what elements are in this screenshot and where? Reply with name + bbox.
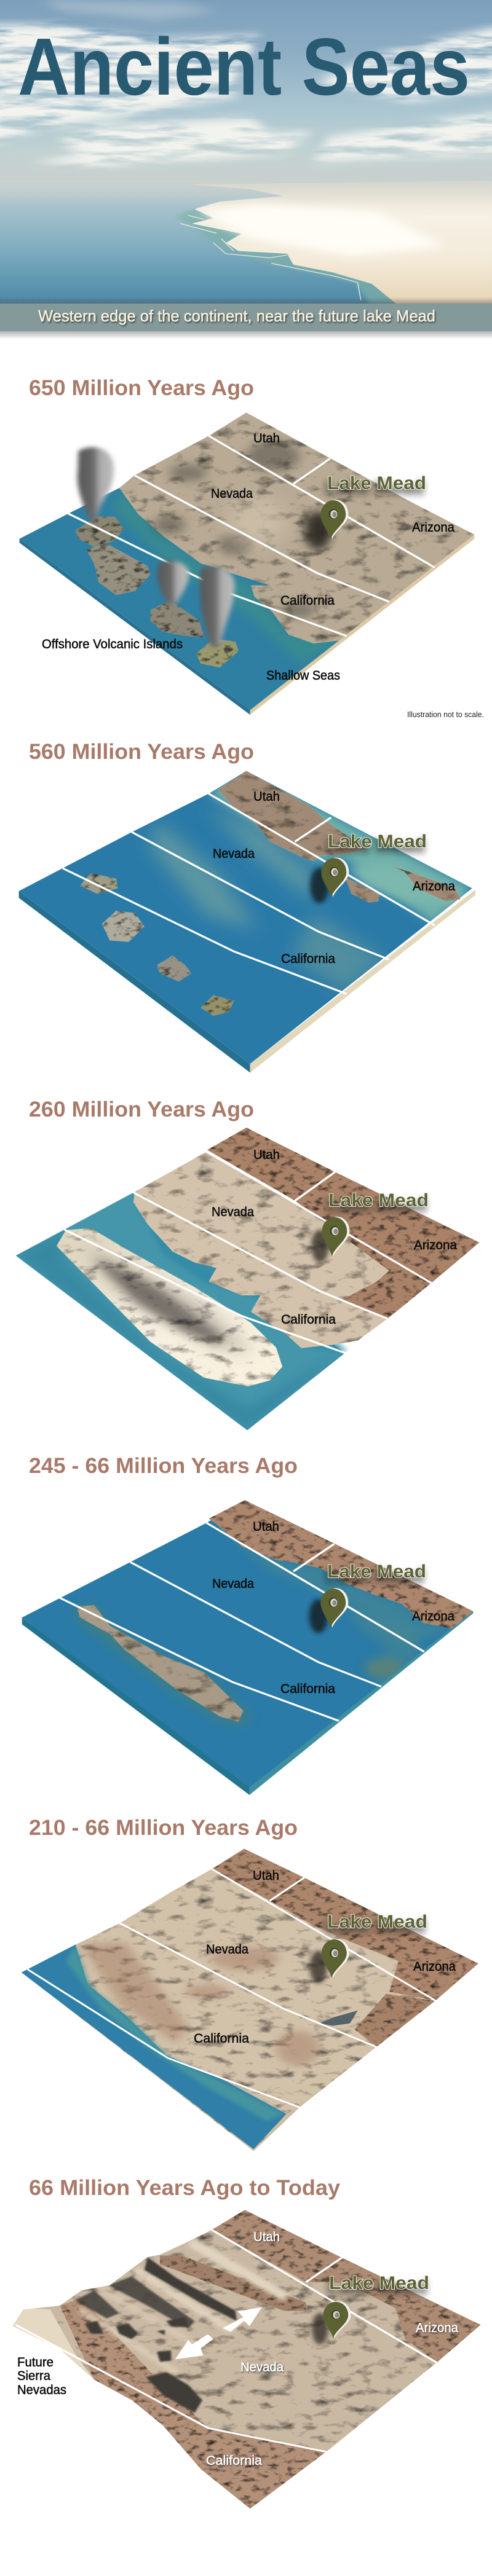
red rock band bbox=[212, 1848, 478, 2001]
panel: map 650 million years ago: Lake Mead bbox=[327, 473, 426, 493]
panel: map 210 - 66 million years ago: California bbox=[194, 2032, 249, 2046]
panel: map 260 million years ago: Arizona bbox=[414, 1238, 457, 1252]
lake bbox=[320, 2011, 358, 2026]
panel: map 650 million years ago: Nevada bbox=[211, 487, 253, 501]
panel: map 245 - 66 million years ago: Utah bbox=[253, 1520, 279, 1534]
tan land bbox=[133, 1152, 432, 1348]
land bbox=[218, 771, 367, 861]
volcanic islands bbox=[75, 517, 239, 667]
panel: map 260 million years ago: Lake Mead bbox=[328, 1190, 429, 1211]
panel: map 66 million years ago to today: Nevada bbox=[240, 2360, 284, 2374]
label: future sierra nevadas: Sierra bbox=[17, 2369, 50, 2383]
pin bbox=[309, 1599, 328, 1633]
arrow: northeast bbox=[223, 2307, 262, 2331]
panel: map 560 million years ago bbox=[19, 771, 475, 1073]
panel: map 66 million years ago to today: Arizona bbox=[416, 2321, 458, 2335]
panel: map 560 million years ago: Utah bbox=[253, 790, 280, 804]
panel: map 245 - 66 million years ago: California bbox=[280, 1682, 335, 1696]
panel: map 650 million years ago: California bbox=[280, 594, 335, 608]
rock belts bbox=[212, 2210, 481, 2363]
caption band: Western edge of the continent, near the future lake Mead bbox=[38, 307, 435, 325]
islands bbox=[80, 873, 234, 1016]
panel: map 560 million years ago: Arizona bbox=[413, 879, 455, 893]
slab edges bbox=[20, 539, 250, 715]
smoke plumes bbox=[77, 447, 235, 647]
shallow sea bbox=[20, 488, 347, 711]
offshore island bbox=[57, 1228, 282, 1386]
pin bbox=[311, 1230, 329, 1262]
panel: map 66 million years ago to today bbox=[12, 2210, 481, 2509]
panel: map 210 - 66 million years ago: Arizona bbox=[413, 1960, 456, 1974]
panel: map 650 million years ago bbox=[20, 412, 484, 719]
panel: map 210 - 66 million years ago: Nevada bbox=[206, 1942, 248, 1957]
state borders bbox=[68, 513, 347, 636]
panel: map 66 million years ago to today: Lake Mead bbox=[329, 2273, 429, 2293]
rocky shore bbox=[208, 1500, 473, 1628]
panel: map 66 million years ago to today: Utah bbox=[253, 2230, 280, 2244]
panel: map 245 - 66 million years ago bbox=[22, 1500, 473, 1795]
label: future sierra nevadas: Nevadas bbox=[17, 2383, 66, 2397]
panel: map 560 million years ago: California bbox=[281, 952, 335, 966]
caption band bbox=[0, 304, 492, 339]
pin bbox=[312, 2313, 328, 2344]
label: future sierra nevadas: Future bbox=[17, 2355, 54, 2370]
heading: 210: 210 - 66 Million Years Ago bbox=[29, 1816, 298, 1840]
heading: 260: 260 Million Years Ago bbox=[29, 1098, 254, 1121]
panel: map 245 - 66 million years ago: Arizona bbox=[412, 1609, 454, 1624]
panel: map 245 - 66 million years ago: Nevada bbox=[212, 1577, 254, 1591]
panel: map 260 million years ago: California bbox=[281, 1313, 336, 1327]
hero image: ancient coastline bbox=[0, 0, 492, 305]
pin bbox=[310, 868, 329, 903]
panel: map 260 million years ago: Utah bbox=[253, 1148, 280, 1162]
panel: map 210 - 66 million years ago bbox=[22, 1848, 478, 2151]
heading: 66 to today: 66 Million Years Ago to Today bbox=[29, 2176, 341, 2200]
panel: map 210 - 66 million years ago: Lake Mead bbox=[327, 1912, 427, 1932]
pin bbox=[310, 1950, 327, 1984]
border lines bbox=[16, 2325, 327, 2452]
panel: map 260 million years ago: Nevada bbox=[212, 1205, 254, 1219]
panel: map 260 million years ago bbox=[16, 1128, 480, 1431]
heading: 245: 245 - 66 Million Years Ago bbox=[29, 1454, 298, 1478]
panel: map 650 million years ago: Shallow Seas bbox=[266, 669, 340, 683]
panel: map 650 million years ago: Arizona bbox=[412, 520, 454, 535]
labels: Utah bbox=[253, 431, 280, 446]
long island bbox=[77, 1605, 243, 1722]
red rock band bbox=[207, 1128, 480, 1319]
panel: map 650 million years ago: Offshore Volcanic Islands bbox=[42, 637, 183, 651]
panel: map 560 million years ago: Lake Mead bbox=[328, 831, 427, 852]
pin bbox=[311, 514, 329, 547]
panel: map 560 million years ago: Nevada bbox=[213, 847, 255, 861]
heading: 560: 560 Million Years Ago bbox=[29, 740, 254, 764]
land bbox=[119, 412, 474, 643]
label: future sierra nevadas bbox=[17, 2355, 66, 2397]
dark valleys and ridges bbox=[75, 2257, 237, 2413]
heading: 650: 650 Million Years Ago bbox=[29, 376, 254, 400]
coastal sea bbox=[22, 1945, 286, 2150]
panel: map 245 - 66 million years ago: Lake Mead bbox=[327, 1561, 426, 1582]
arrow: southwest bbox=[175, 2334, 213, 2359]
panel: map 650 million years ago: Illustration not to scale. bbox=[407, 710, 484, 719]
panel: map 210 - 66 million years ago: Utah bbox=[253, 1869, 279, 1883]
panel: map 66 million years ago to today: California bbox=[206, 2454, 262, 2468]
